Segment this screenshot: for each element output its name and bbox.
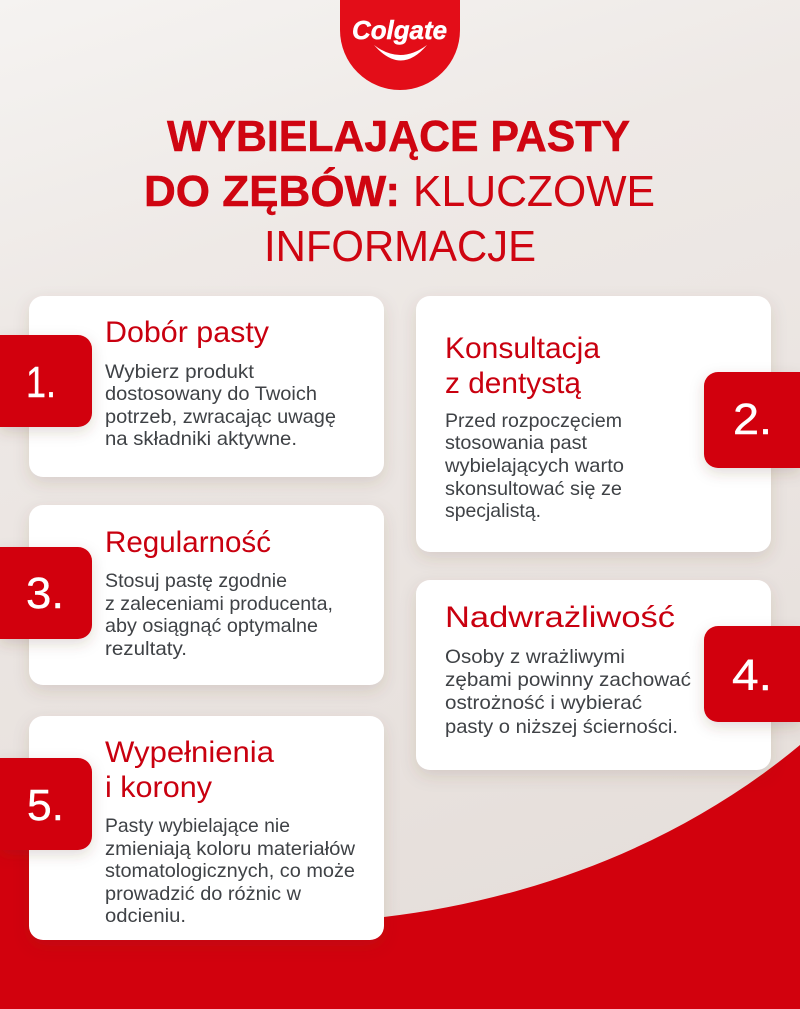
text: card 3 body: aby osiągnąć optymalne: [105, 616, 318, 637]
badge: number 2: 2.: [733, 395, 772, 444]
text: card 1 body: [105, 362, 336, 450]
text: card 3 body: z zaleceniami producenta,: [105, 594, 333, 615]
heading: Konsultacja z dentystą: [445, 332, 601, 400]
title: DO ZĘBÓW:: [144, 166, 400, 216]
text: card 2 body: [444, 411, 624, 522]
text: card 5 body: stomatologicznych, co może: [105, 861, 355, 882]
badge: number 4: [704, 626, 800, 722]
badge: number 1: 1.: [26, 358, 56, 407]
text: card 2 body: Przed rozpoczęciem: [445, 411, 622, 432]
panel: card 5: [29, 716, 384, 940]
text: card 4 body: pasty o niższej ścierności.: [445, 717, 678, 738]
heading: Dobór pasty: Dobór pasty: [105, 316, 269, 349]
text: card 4 body: [445, 647, 691, 738]
text: card 5 body: [105, 816, 355, 927]
text: card 5 body: zmieniają koloru materiałów: [105, 839, 355, 860]
badge: number 4: 4.: [732, 651, 772, 700]
panel: card 2: [416, 296, 771, 552]
title: KLUCZOWE: [413, 167, 655, 216]
logo: Colgate: Colgate: [352, 15, 447, 45]
badge: number 3: [0, 547, 92, 639]
text: card 3 body: [105, 571, 333, 660]
heading: Konsultacja z dentystą: z dentystą: [445, 367, 582, 400]
panel: card 4: [416, 580, 771, 770]
text: card 5 body: odcieniu.: [105, 906, 186, 927]
logo: Colgate: [340, 0, 460, 90]
text: card 2 body: specjalistą.: [445, 501, 541, 522]
text: card 2 body: wybielających warto: [444, 456, 624, 477]
title: INFORMACJE: [264, 222, 536, 271]
text: card 5 body: prowadzić do różnic w: [105, 884, 301, 905]
badge: number 2: [704, 372, 800, 468]
text: card 1 body: Wybierz produkt: [105, 362, 255, 383]
heading: Wypełnienia i korony: Wypełnienia: [105, 736, 275, 769]
heading: Konsultacja z dentystą: Konsultacja: [445, 332, 601, 365]
text: card 4 body: Osoby z wrażliwymi: [445, 647, 625, 668]
badge: number 5: 5.: [27, 781, 64, 830]
heading: Regularność: Regularność: [105, 526, 271, 559]
badge: number 5: [0, 758, 92, 850]
panel: card 3: [29, 505, 384, 685]
text: card 1 body: potrzeb, zwracając uwagę: [105, 407, 336, 428]
badge: number 3: 3.: [26, 569, 64, 618]
text: card 5 body: Pasty wybielające nie: [105, 816, 290, 837]
heading: Wypełnienia i korony: i korony: [105, 771, 212, 804]
text: card 2 body: stosowania past: [445, 433, 588, 454]
text: card 3 body: Stosuj pastę zgodnie: [105, 571, 287, 592]
title: WYBIELAJĄCE PASTY: [167, 112, 630, 161]
text: card 1 body: dostosowany do Twoich: [105, 384, 317, 405]
text: card 3 body: rezultaty.: [105, 639, 187, 660]
text: card 2 body: skonsultować się ze: [445, 479, 622, 500]
text: card 4 body: ostrożność i wybierać: [445, 693, 642, 714]
text: card 1 body: na składniki aktywne.: [105, 429, 297, 450]
panel: card 1: [29, 296, 384, 477]
heading: Wypełnienia i korony: [105, 736, 275, 804]
badge: number 1: [0, 335, 92, 427]
text: card 4 body: zębami powinny zachować: [445, 670, 691, 691]
heading: Nadwrażliwość: Nadwrażliwość: [445, 601, 675, 634]
red curved bottom shape: [0, 745, 800, 1009]
title: [144, 112, 655, 271]
